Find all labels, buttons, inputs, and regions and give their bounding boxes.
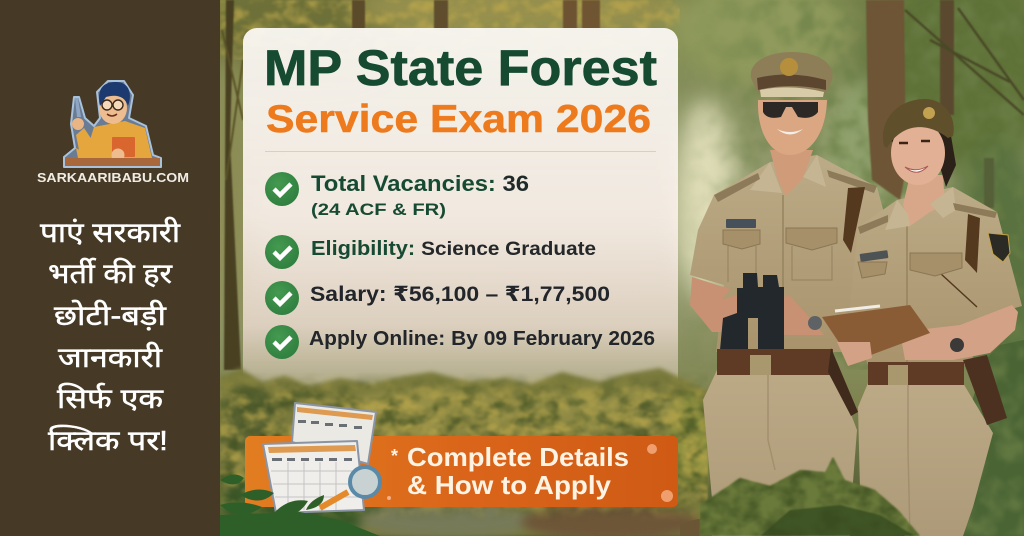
icon: mascot reading at a desk — [64, 81, 161, 167]
item: eligibility: Eligibility: Science Graduate — [311, 238, 596, 260]
site name: SARKAARIBABU.COM — [37, 170, 189, 185]
belt — [717, 349, 833, 375]
collar — [885, 187, 956, 230]
item: apply online — [265, 325, 655, 359]
sidebar Hindi message: क्लिक पर! — [48, 424, 168, 456]
icon: check — [265, 172, 299, 206]
name tag — [726, 219, 756, 228]
mascot outline — [64, 81, 161, 167]
pockets — [858, 253, 962, 278]
head and cap — [758, 100, 827, 155]
officers illustration — [690, 52, 1022, 536]
canopy leaf texture — [220, 0, 1024, 370]
panel: left sidebar — [0, 0, 220, 536]
strap — [843, 187, 865, 253]
sidebar Hindi message: छोटी-बड़ी — [54, 299, 167, 331]
sidebar Hindi message: जानकारी — [58, 341, 163, 373]
foreground leaves — [220, 474, 380, 536]
trousers — [703, 367, 857, 536]
collar — [750, 155, 826, 193]
pouch — [963, 355, 1007, 425]
neck — [903, 175, 945, 226]
shirt — [690, 155, 890, 352]
item: apply online: Apply Online: By 09 February 2026 — [309, 328, 655, 350]
sidebar Hindi message — [40, 216, 181, 456]
title: MP State Forest — [264, 40, 657, 96]
sidebar Hindi message: पाएं सरकारी — [40, 216, 181, 248]
head and beret — [888, 130, 956, 187]
icon: clipboard — [822, 305, 930, 362]
male officer — [690, 52, 890, 536]
call-to-action button — [220, 403, 678, 536]
item: total vacancies: Total Vacancies: 36 — [311, 171, 529, 196]
icon: check — [265, 235, 299, 269]
icon: binoculars — [720, 273, 784, 350]
call-to-action button: & How to Apply — [407, 470, 612, 500]
call-to-action button: Complete Details — [407, 442, 629, 472]
icon: check — [265, 281, 299, 315]
arms and hands — [690, 277, 747, 332]
female officer — [822, 99, 1022, 536]
right side foliage — [960, 340, 1024, 536]
item: eligibility — [265, 235, 596, 269]
sidebar Hindi message: भर्ती की हर — [48, 257, 173, 289]
strap — [965, 214, 980, 273]
item: salary: Salary: ₹56,100 – ₹1,77,500 — [310, 283, 610, 306]
call-to-action button: * — [391, 446, 398, 466]
holster strap — [828, 348, 858, 416]
icon: check — [265, 325, 299, 359]
name tag — [860, 250, 888, 262]
panel: exam info card — [243, 28, 678, 400]
shoulder patch — [988, 233, 1010, 262]
belt — [868, 362, 964, 385]
neck — [770, 150, 813, 196]
background tree trunks — [222, 0, 1024, 370]
sidebar Hindi message: सिर्फ एक — [57, 382, 164, 414]
pockets — [723, 228, 837, 250]
bottom foliage — [220, 340, 1024, 536]
item: total vacancies — [265, 171, 529, 219]
foreground bush — [700, 457, 920, 536]
epaulettes — [858, 203, 997, 234]
shirt — [850, 187, 1022, 365]
trousers — [858, 383, 993, 536]
icon: calendars and magnifier — [263, 403, 380, 513]
subtitle: Service Exam 2026 — [266, 98, 651, 141]
epaulettes — [714, 170, 877, 202]
item: total vacancies: (24 ACF & FR) — [311, 200, 446, 219]
item: salary — [265, 281, 610, 315]
arms and hands — [900, 305, 1018, 360]
